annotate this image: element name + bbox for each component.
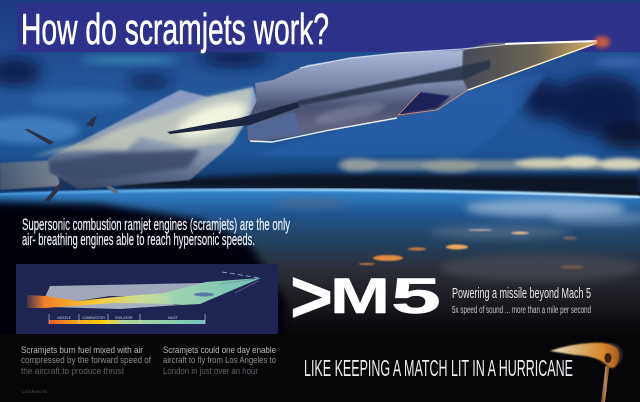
- dark band above horizon: [120, 174, 640, 195]
- intro text: air- breathing engines able to reach hypersonic speeds.: [22, 230, 255, 249]
- engine legend: NOZZLE: [57, 316, 72, 320]
- engine legend: INLET: [168, 316, 179, 320]
- engine legend: [49, 314, 205, 324]
- shock dashes: [222, 272, 260, 278]
- translucent shock cone: [250, 72, 547, 155]
- mach 5 figure: [290, 255, 441, 338]
- upper wall: [45, 283, 203, 301]
- compression shock lines: [220, 279, 258, 293]
- spike: [167, 102, 300, 134]
- right caption: aircraft to fly from Los Angeles to: [163, 355, 276, 366]
- nose section: [462, 42, 599, 90]
- flame halo: [599, 343, 623, 367]
- scramjet missile: [24, 36, 610, 202]
- inlet flow: [160, 278, 261, 305]
- intro text: [22, 215, 290, 249]
- earth surface: [0, 190, 640, 345]
- engine legend: ISOLATOR: [115, 316, 133, 320]
- match head: [604, 353, 612, 363]
- dark clouds in sky: [0, 50, 640, 149]
- mach 5 figure: 5: [391, 268, 441, 324]
- icon: lit match: [550, 343, 623, 402]
- engine legend: COMBUSTOR: [82, 316, 105, 320]
- mach 5 figure: M: [330, 268, 390, 324]
- credit: Lockheed M: [22, 389, 47, 394]
- intro text: Supersonic combustion ramjet engines (scramjets) are the only: [22, 215, 290, 234]
- lower wall: [49, 301, 180, 309]
- lower leading edge: [468, 43, 597, 90]
- rear fins: [24, 116, 119, 202]
- orange city-lit clouds: [359, 229, 584, 269]
- dark mid stripe: [297, 60, 490, 106]
- inlet hot edge: [398, 90, 468, 115]
- right caption: [163, 345, 276, 377]
- inlet cutout: [397, 92, 450, 115]
- leading edge highlight: [300, 41, 597, 68]
- nose top highlight: [505, 41, 597, 44]
- engine blue hull: [249, 112, 300, 140]
- booster body: [48, 87, 257, 189]
- dark foreground falloff: [0, 201, 285, 345]
- left caption: the aircraft to produce thrust: [21, 366, 124, 377]
- title: How do scramjets work?: [21, 5, 329, 54]
- match stick: [601, 362, 610, 402]
- mach 5 description: [452, 285, 591, 316]
- flow arrow: [194, 292, 214, 296]
- mach 5 figure: >: [290, 255, 333, 338]
- engine diagram panel: [16, 264, 278, 334]
- left caption: [21, 345, 151, 377]
- missile plume at left: [0, 160, 60, 190]
- bottom black area: [0, 334, 640, 402]
- nose glow: [594, 36, 610, 48]
- sky: [0, 0, 640, 192]
- combustion flow: [27, 293, 175, 308]
- booster glow: [174, 95, 250, 145]
- earth cloud texture: [275, 199, 640, 282]
- title banner: [17, 3, 640, 54]
- mottled lower hull: [313, 99, 387, 127]
- booster pale diamonds: [30, 88, 253, 157]
- engine underside highlight: [250, 118, 397, 142]
- booster shadow band: [50, 150, 200, 182]
- forebody upper: [247, 42, 599, 143]
- light sky streaks: [0, 56, 640, 144]
- left caption: Scramjets burn fuel mixed with air: [21, 345, 143, 356]
- horizon glow: [0, 190, 640, 197]
- right caption: London in just over an hour: [163, 366, 258, 377]
- left caption: compressed by the forward speed of: [21, 355, 151, 366]
- right caption: Scramjets could one day enable: [163, 345, 276, 356]
- exhaust cloud band: [338, 156, 640, 173]
- flame: [550, 343, 619, 368]
